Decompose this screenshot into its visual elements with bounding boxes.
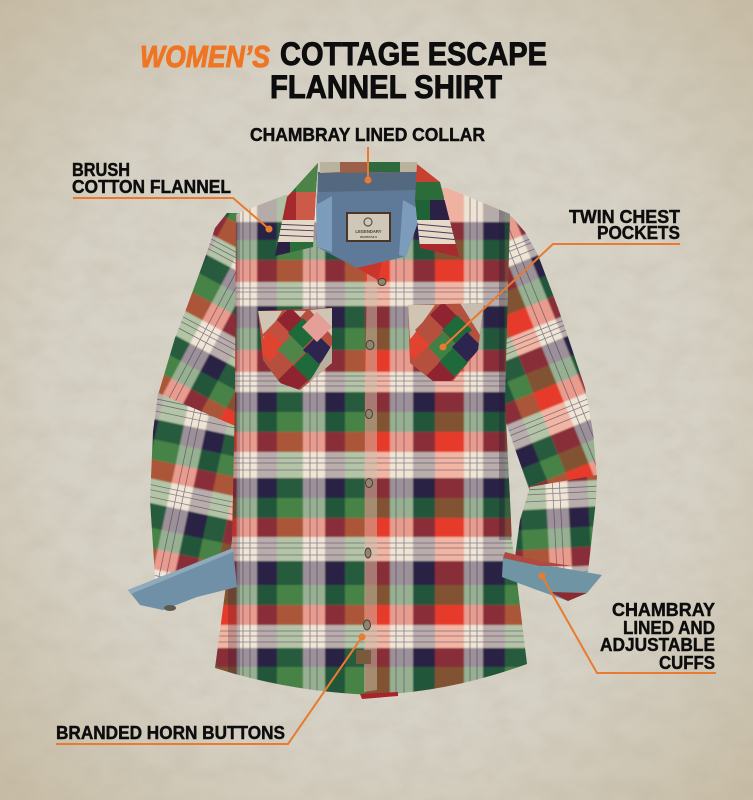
right sleeve lower xyxy=(515,475,597,572)
branded hem tag xyxy=(356,650,371,664)
left sleeve lower xyxy=(150,393,234,579)
button placket xyxy=(364,268,377,692)
brand neck label: WHITETAILS xyxy=(360,235,377,239)
shirt buttons xyxy=(364,278,386,630)
right sleeve upper xyxy=(505,216,597,490)
callout: chambray lined and adjustable cuffs: CHAMBRAY xyxy=(612,600,715,620)
brand neck label xyxy=(346,212,391,242)
callout: branded horn buttons xyxy=(56,634,366,744)
callout: branded horn buttons: BRANDED HORN BUTTONS xyxy=(56,723,285,743)
callout: brush cotton flannel: BRUSH xyxy=(72,160,130,180)
right chest pocket xyxy=(408,303,484,381)
callout: chambray lined and adjustable cuffs: ADJUSTABLE xyxy=(600,635,715,655)
callout: chambray lined and adjustable cuffs: CUFFS xyxy=(659,653,715,673)
callout: twin chest pockets xyxy=(440,207,680,350)
callout: twin chest pockets: TWIN CHEST xyxy=(569,207,680,227)
title: WOMEN’S xyxy=(140,39,270,74)
title: COTTAGE ESCAPE xyxy=(280,36,547,72)
back collar band xyxy=(320,162,417,173)
brand neck label: LEGENDARY xyxy=(355,229,382,234)
title: FLANNEL SHIRT xyxy=(270,69,502,105)
hem inner fold xyxy=(360,692,398,699)
red shirt front under collar xyxy=(357,262,382,280)
callout: brush cotton flannel: COTTON FLANNEL xyxy=(72,177,231,197)
callout: chambray lined collar xyxy=(250,125,485,184)
left chest pocket xyxy=(258,308,332,390)
right collar leaf xyxy=(415,164,459,257)
flannel shirt illustration xyxy=(128,162,602,726)
callout: twin chest pockets: POCKETS xyxy=(597,223,680,243)
right rolled chambray cuff xyxy=(502,552,602,601)
callout: chambray lined collar: CHAMBRAY LINED COLLAR xyxy=(250,125,485,145)
chambray collar lining xyxy=(317,171,417,268)
left collar leaf xyxy=(275,163,318,256)
callout: brush cotton flannel xyxy=(72,160,272,232)
callout: chambray lined and adjustable cuffs: LINED AND xyxy=(623,618,715,638)
left rolled chambray cuff xyxy=(128,548,237,611)
left sleeve upper xyxy=(153,213,238,432)
shirt body xyxy=(215,188,527,694)
title xyxy=(140,36,547,105)
callout: chambray lined and adjustable cuffs xyxy=(538,572,716,673)
